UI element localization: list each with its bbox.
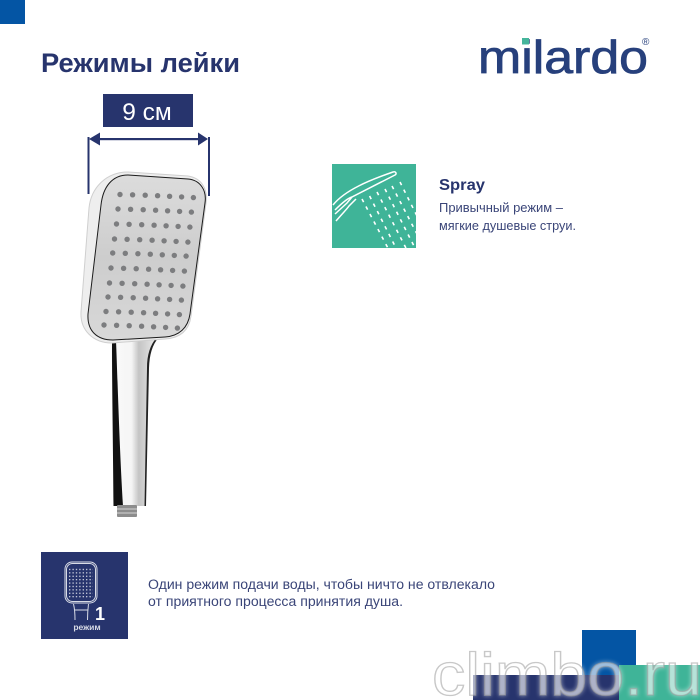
- head body: [81, 172, 206, 343]
- dimension arrow: [88, 132, 210, 196]
- threaded nut: [117, 505, 137, 517]
- one mode icon: [41, 552, 128, 639]
- description text: от приятного процесса принятия душа.: [148, 594, 403, 609]
- spray nozzles: [101, 192, 196, 331]
- one mode icon: 1: [95, 604, 105, 624]
- description text: [148, 577, 495, 609]
- title: Режимы лейки: [41, 48, 240, 78]
- bottom colour blocks: [473, 630, 700, 700]
- handle: [110, 336, 159, 506]
- Spray mode text: Привычный режим –: [439, 201, 563, 215]
- Spray mode text: мягкие душевые струи.: [439, 219, 576, 233]
- logo: milardo: ®: [642, 37, 650, 48]
- corner square: [0, 0, 25, 24]
- description text: Один режим подачи воды, чтобы ничто не отвлекало: [148, 577, 495, 592]
- width label: 9 см: 9 см: [122, 99, 172, 126]
- shower head product: [81, 172, 206, 517]
- logo: milardo: milardo: [478, 31, 648, 83]
- width label: 9 см: [103, 94, 193, 127]
- one mode icon: режим: [73, 622, 101, 632]
- head face: [88, 175, 205, 340]
- Spray mode text: [439, 177, 576, 233]
- spray mode icon: [332, 164, 420, 252]
- Spray mode text: Spray: [439, 177, 485, 194]
